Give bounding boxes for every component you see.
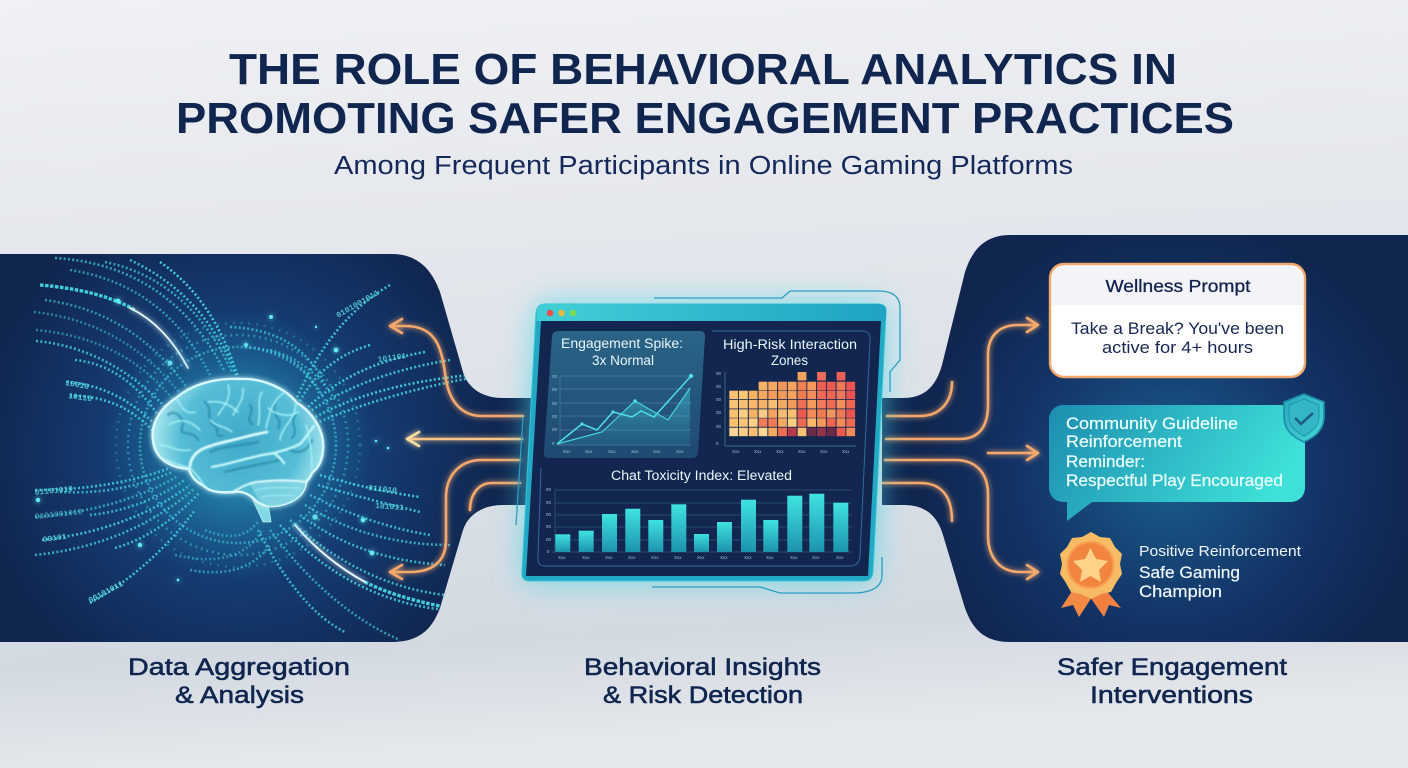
chart: chat toxicity index: 00 <box>546 500 552 505</box>
chart: high-risk interaction zones heatmap: High-Risk Interaction <box>723 337 857 352</box>
chart: engagement spike: Xxx <box>653 449 661 454</box>
label: safer engagement interventions <box>1057 654 1287 709</box>
binary digits: 00101011 <box>87 580 125 606</box>
chart: high-risk interaction zones heatmap: Xxx <box>732 449 740 454</box>
label: behavioral insights and risk detection: Behavioral Insights <box>584 654 821 681</box>
chart: high-risk interaction zones heatmap: Xxx <box>754 449 762 454</box>
binary digits: 01101010 <box>34 485 74 498</box>
label: behavioral insights and risk detection <box>584 654 821 709</box>
chart: engagement spike: 0 <box>552 441 555 446</box>
panel: safer engagement interventions <box>882 235 1408 642</box>
panel: data aggregation and analysis <box>0 254 535 642</box>
chart: engagement spike: 00 <box>552 414 558 419</box>
chart: chat toxicity index: 00 <box>546 537 552 542</box>
window title bar <box>536 304 886 321</box>
binary digits: 00101 <box>42 533 67 545</box>
binary digits: 101101 <box>377 352 407 365</box>
chart: high-risk interaction zones heatmap: Xxx <box>842 449 850 454</box>
binary digits: 0101001010 <box>34 508 83 522</box>
label: data aggregation and analysis <box>128 654 350 709</box>
binary digits: 0101001011 <box>335 289 381 321</box>
subtitle: Among Frequent Participants in Online Gaming Platforms <box>334 152 1073 180</box>
chart: high-risk interaction zones heatmap: 00 <box>716 384 722 389</box>
chart: chat toxicity index: Xxx <box>605 555 613 560</box>
chart: chat toxicity index: Xxx <box>697 555 705 560</box>
chart: chat toxicity index: 00 <box>546 512 552 517</box>
text: positive reinforcement: Positive Reinforcement <box>1139 544 1301 560</box>
chart: high-risk interaction zones heatmap: 0 <box>716 441 719 446</box>
window controls <box>547 310 576 316</box>
chart: engagement spike: 00 <box>552 387 558 392</box>
dashboard monitor <box>516 291 900 593</box>
text: positive reinforcement <box>1139 544 1301 601</box>
label: data aggregation and analysis: & Analysis <box>175 682 304 709</box>
chart: chat toxicity index: Xxx <box>628 555 636 560</box>
light swooshes <box>130 308 365 582</box>
chart: chat toxicity index: Xxx <box>790 555 798 560</box>
label: behavioral insights and risk detection: & Risk Detection <box>603 682 803 709</box>
chart: chat toxicity index: Xxx <box>744 555 752 560</box>
icon: award medal <box>1060 532 1122 617</box>
binary digits: 10010 <box>64 379 90 392</box>
chart: engagement spike: Xxx <box>676 449 684 454</box>
card: community guideline speech bubble: Reminder: <box>1066 453 1145 471</box>
chart: engagement spike: 00 <box>552 401 558 406</box>
chart: engagement spike: 3x Normal <box>592 353 654 368</box>
chart: high-risk interaction zones heatmap: 00 <box>716 410 722 415</box>
chart: high-risk interaction zones heatmap: Xxx <box>798 449 806 454</box>
cerebellum shading <box>250 479 306 506</box>
chart: high-risk interaction zones heatmap <box>716 337 857 454</box>
chart: high-risk interaction zones heatmap: 00 <box>716 371 722 376</box>
chart: high-risk interaction zones heatmap: Zones <box>771 353 808 368</box>
monitor frame <box>522 304 886 581</box>
chart: high-risk interaction zones heatmap: 00 <box>716 397 722 402</box>
chart: chat toxicity index: Chat Toxicity Index: Elevated <box>611 468 792 483</box>
circuit traces <box>516 291 900 593</box>
card: wellness prompt: Wellness Prompt <box>1106 276 1251 296</box>
data streams: dotted binary arcs <box>34 258 470 640</box>
chart: engagement spike: Xxx <box>608 449 616 454</box>
chart: engagement spike: Engagement Spike: <box>561 336 683 351</box>
card: wellness prompt: Take a Break? You've been <box>1071 319 1284 338</box>
title <box>176 46 1234 143</box>
text: positive reinforcement: Safe Gaming <box>1139 564 1240 582</box>
title: THE ROLE OF BEHAVIORAL ANALYTICS IN <box>229 46 1177 94</box>
chart: engagement spike: 00 <box>552 374 558 379</box>
card: wellness prompt: active for 4+ hours <box>1102 338 1253 357</box>
chart: chat toxicity index: Xxx <box>720 555 728 560</box>
chart: chat toxicity index <box>546 468 852 560</box>
label: safer engagement interventions: Interventions <box>1090 682 1253 709</box>
glowing particles <box>36 299 389 581</box>
screen <box>526 321 881 576</box>
card: community guideline speech bubble <box>1049 405 1305 521</box>
arrows: flowing to data analysis <box>390 319 523 579</box>
chart: chat toxicity index: Xxx <box>836 555 844 560</box>
binary digits: 10110 <box>68 392 93 404</box>
chart: chat toxicity index: Xxx <box>812 555 820 560</box>
chart: chat toxicity index: 00 <box>546 487 552 492</box>
chart: engagement spike: Xxx <box>563 449 571 454</box>
chart panel outlines <box>538 331 870 566</box>
chart: engagement spike: 00 <box>552 427 558 432</box>
binary digits: 101011 <box>375 502 404 513</box>
chart: chat toxicity index: Xxx <box>558 555 566 560</box>
chart: engagement spike <box>544 331 705 458</box>
card: wellness prompt <box>1050 264 1305 377</box>
binary digits <box>34 289 407 606</box>
chart: engagement spike: Xxx <box>631 449 639 454</box>
binary digits: 011010 <box>368 484 397 496</box>
chart: chat toxicity index: Xxx <box>582 555 590 560</box>
chart: engagement spike: Xxx <box>585 449 593 454</box>
chart: chat toxicity index: 00 <box>546 524 552 529</box>
chart: high-risk interaction zones heatmap: Xxx <box>820 449 828 454</box>
card: community guideline speech bubble: Reinforcement <box>1066 433 1182 451</box>
chart: chat toxicity index: Xxx <box>674 555 682 560</box>
card: community guideline speech bubble: Respectful Play Encouraged <box>1066 472 1283 490</box>
chart: high-risk interaction zones heatmap: Xxx <box>776 449 784 454</box>
chart: chat toxicity index: Xxx <box>651 555 659 560</box>
chart: chat toxicity index: 0 <box>547 549 550 554</box>
chart: chat toxicity index: Xxx <box>766 555 774 560</box>
label: safer engagement interventions: Safer Engagement <box>1057 654 1287 681</box>
arrows: flowing to interventions <box>883 318 1038 579</box>
icon: glowing brain <box>103 310 373 580</box>
title: PROMOTING SAFER ENGAGEMENT PRACTICES <box>176 95 1234 143</box>
label: data aggregation and analysis: Data Aggregation <box>128 654 350 681</box>
text: positive reinforcement: Champion <box>1139 583 1222 601</box>
icon: shield with check <box>1284 394 1324 442</box>
chart: high-risk interaction zones heatmap: 00 <box>716 424 722 429</box>
card: community guideline speech bubble: Community Guideline <box>1066 415 1238 433</box>
